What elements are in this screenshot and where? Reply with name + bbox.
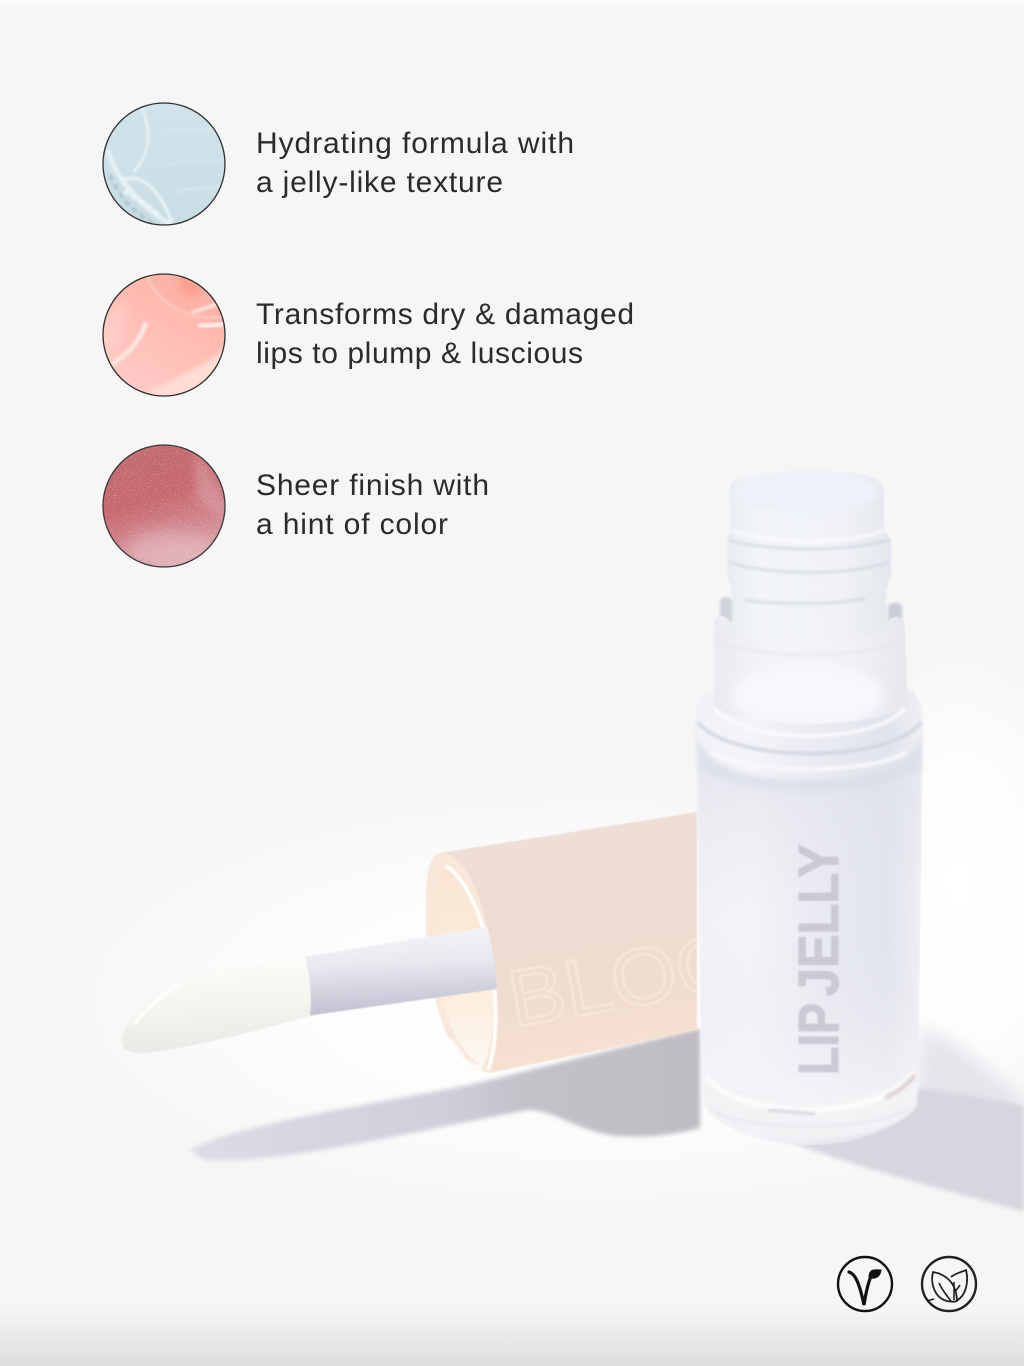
product: bottle [695,470,923,1145]
icon: vegan leaf badge [838,1257,892,1311]
text: sheer finish: a hint of color [256,508,448,541]
product: applicator wand [122,927,497,1056]
bottle label: LIP JELLY: JELLY [787,844,851,996]
bottle label: LIP JELLY: LIP [787,1003,851,1075]
text: hydrating formula: Hydrating formula with [256,127,574,160]
bottle body [695,688,923,1145]
bottle label: LIP JELLY [787,844,851,1075]
swatch: water-like hydrating texture [100,100,230,230]
bottle neck [714,616,908,730]
icon: natural leaves badge [922,1257,976,1311]
swatch: sheer rose shimmer [102,444,226,568]
bottle base ring [702,1072,918,1139]
text: transforms dry lips: Transforms dry & damaged [256,298,634,331]
bottle thread plug [720,470,902,640]
product: lip jelly cap [425,812,698,1074]
text: transforms dry lips: lips to plump & luscious [256,337,583,370]
text: hydrating formula [256,127,574,199]
text: sheer finish [256,469,489,541]
text: sheer finish: Sheer finish with [256,469,489,502]
embossed BLOOM wordmark: BLOOM [501,903,818,1044]
bottle shoulder ring [696,730,922,792]
text: transforms dry lips [256,298,634,370]
text: hydrating formula: a jelly-like texture [256,166,503,199]
cast shadows [190,1028,1024,1212]
swatch: peach plumping gloss [102,273,226,397]
